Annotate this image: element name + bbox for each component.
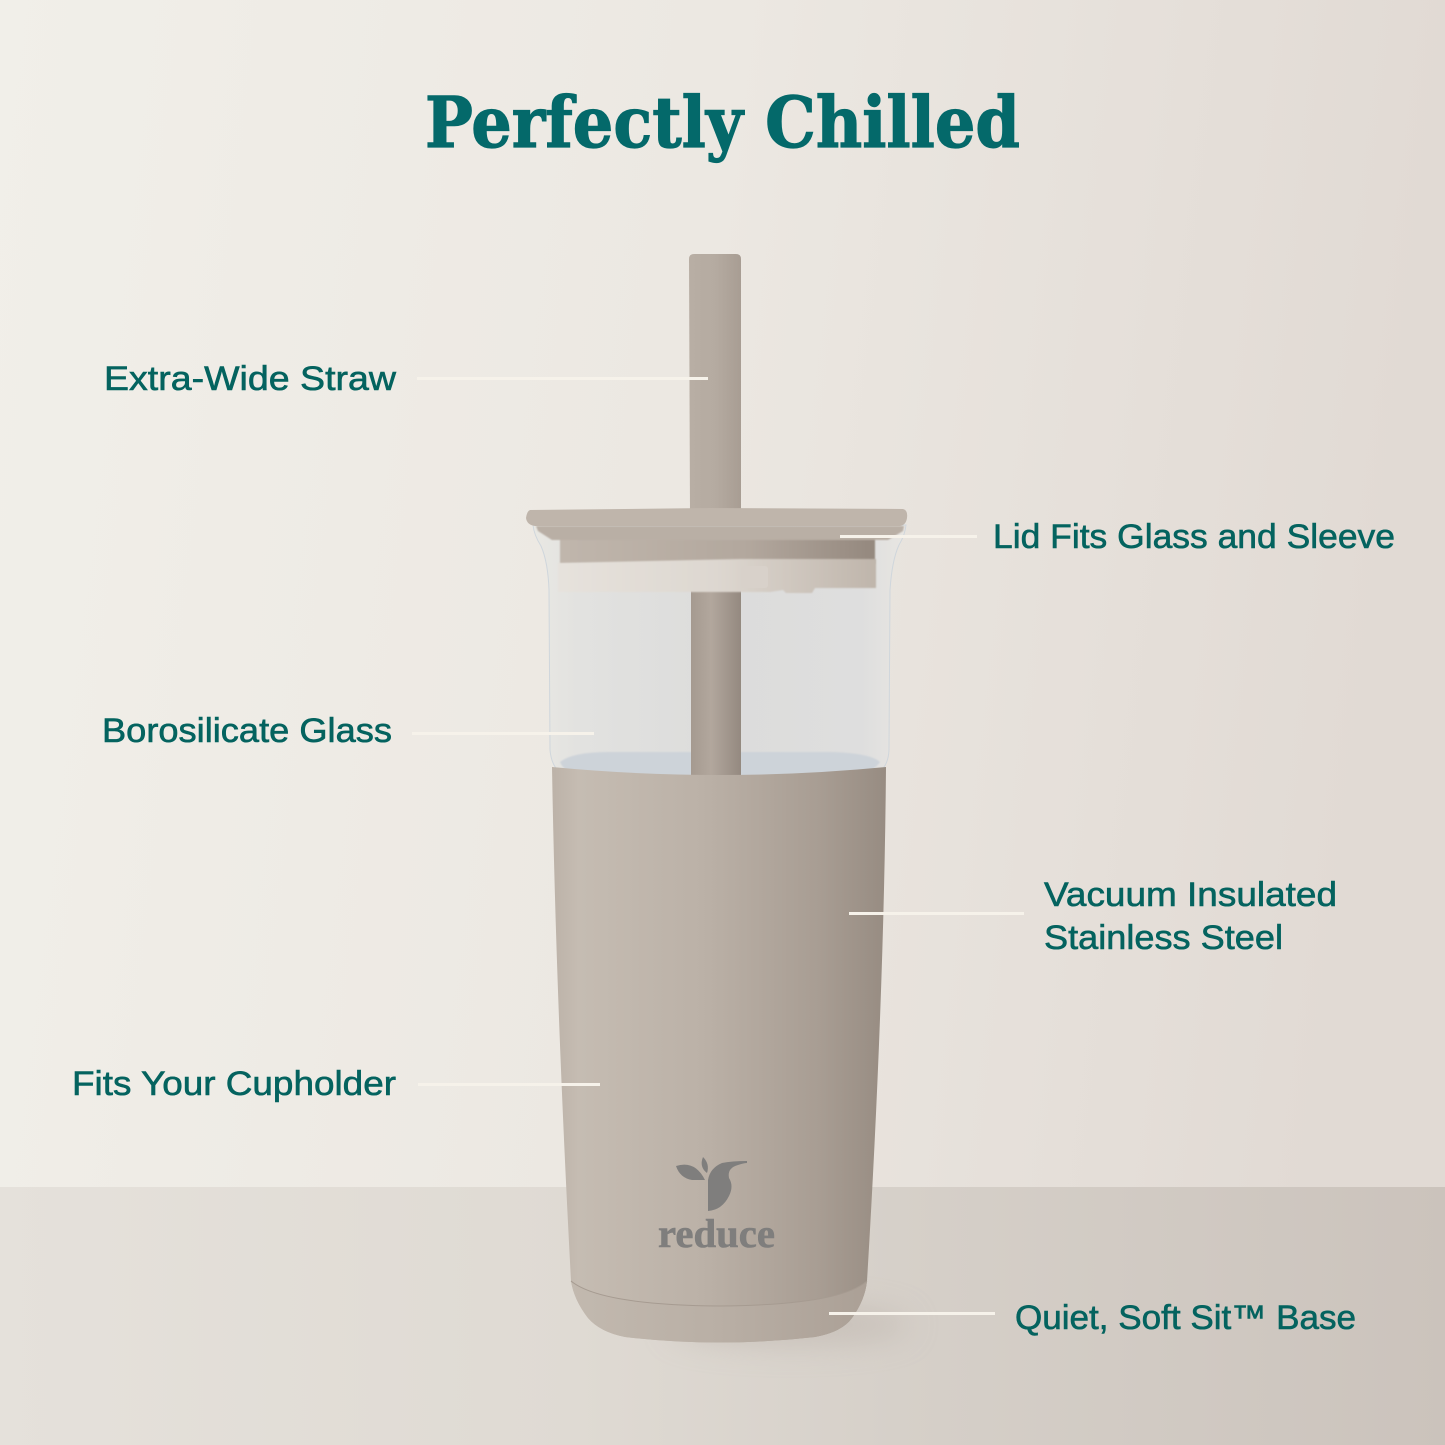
steel sleeve [552, 767, 886, 1342]
label: steel [1044, 876, 1337, 957]
logo wordmark: reduce [658, 1211, 775, 1256]
leader line: steel [849, 912, 1024, 915]
lid silicone seal [558, 559, 876, 593]
label: base: Quiet, Soft Sit™ Base [1015, 1299, 1356, 1337]
leader line: base [829, 1312, 995, 1315]
title: Perfectly Chilled [425, 81, 1020, 164]
straw above lid [689, 254, 741, 512]
leader line: cupholder [418, 1083, 600, 1086]
lid rim band [536, 526, 904, 540]
label: glass: Borosilicate Glass [102, 712, 392, 750]
leader line: lid [840, 535, 977, 538]
background floor [0, 1187, 1445, 1445]
leader line: glass [412, 732, 594, 735]
label: cupholder: Fits Your Cupholder [72, 1065, 396, 1103]
tumbler illustration [526, 254, 907, 1342]
glass water bottom [560, 752, 880, 776]
label: lid: Lid Fits Glass and Sleeve [993, 518, 1395, 556]
lid top [526, 508, 907, 526]
seal tab [741, 566, 768, 588]
label: steel: Vacuum Insulated [1044, 876, 1337, 914]
sleeve base [571, 1281, 867, 1342]
floor shadow [670, 1307, 910, 1343]
label: steel: Stainless Steel [1044, 919, 1283, 957]
straw inside glass [691, 590, 741, 775]
lid inner plug [560, 538, 875, 564]
glass cup [533, 525, 906, 776]
label: straw: Extra-Wide Straw [104, 360, 396, 398]
leader line: straw [417, 377, 708, 380]
logo leaf mark [676, 1157, 747, 1211]
